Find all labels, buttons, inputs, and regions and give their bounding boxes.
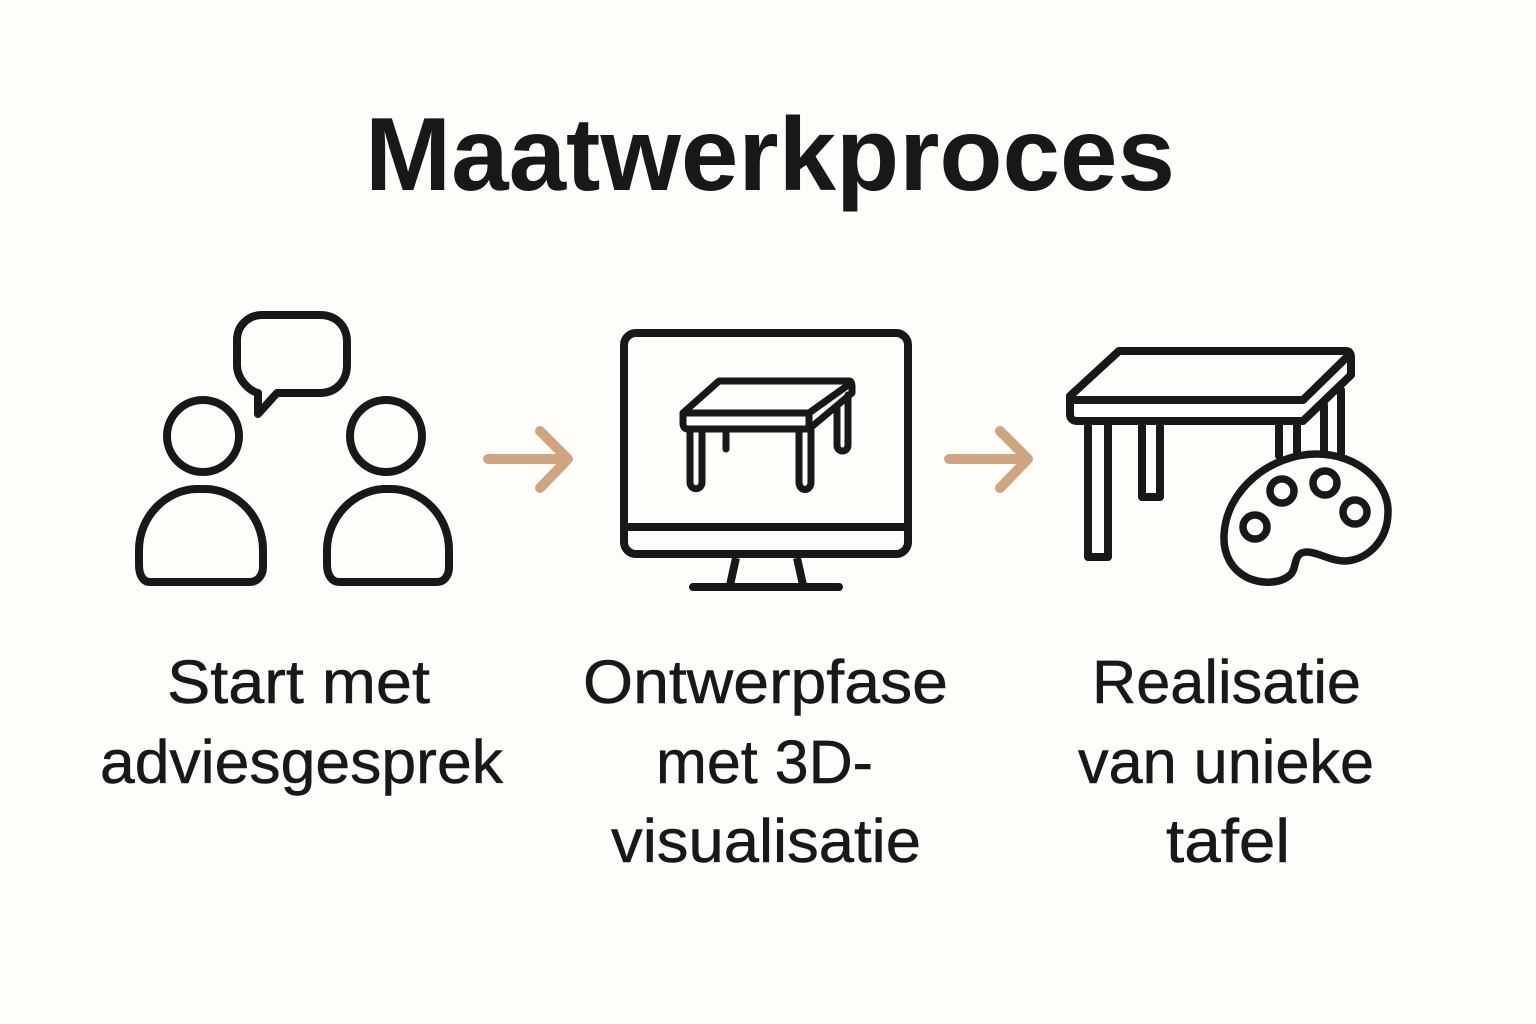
icon: two people in conversation (139, 315, 449, 582)
small table (683, 381, 852, 490)
large table (1070, 351, 1351, 557)
label: step 3: tafel (1166, 807, 1290, 875)
label: step 2: Ontwerpfase (583, 648, 948, 716)
label: step 2: visualisatie (611, 807, 921, 875)
monitor (624, 333, 908, 587)
arrow 1 (488, 431, 568, 488)
icon: monitor with 3D table (624, 333, 908, 587)
label: step 1 (100, 648, 504, 796)
label: step 1: Start met (167, 648, 430, 716)
label: step 3: Realisatie (1092, 648, 1361, 716)
speech bubble (237, 315, 347, 414)
right person (327, 400, 449, 582)
palette (1224, 454, 1388, 582)
label: step 3: van unieke (1078, 728, 1374, 796)
label: step 2: met 3D- (656, 728, 873, 796)
label: step 2 (583, 648, 948, 875)
label: step 1: adviesgesprek (100, 728, 504, 796)
icon: table with paint palette (1070, 351, 1388, 582)
title: Maatwerkproces (365, 97, 1175, 213)
arrow 2 (949, 431, 1028, 488)
label: step 3 (1078, 648, 1374, 875)
left person (139, 400, 263, 582)
